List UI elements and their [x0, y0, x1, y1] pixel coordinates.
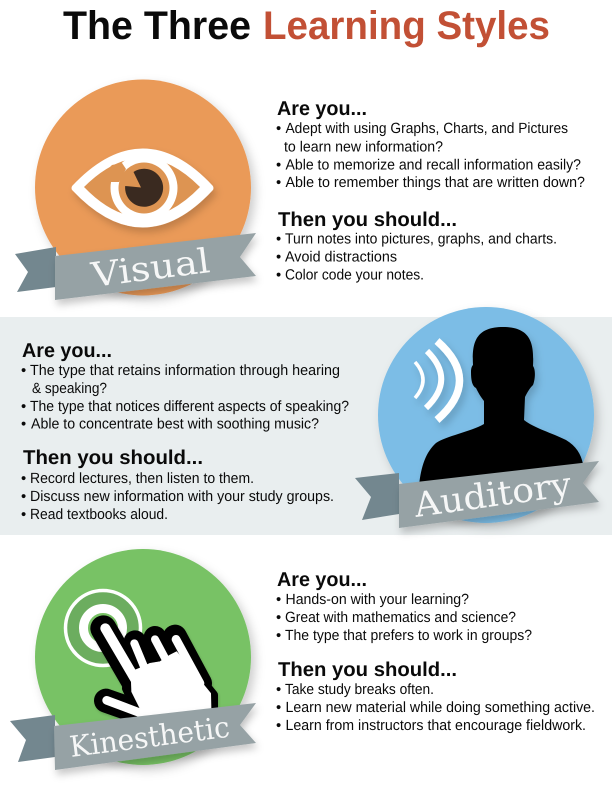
text block: auditory recommendations: •	[21, 507, 26, 523]
text block: visual questions: •	[276, 158, 281, 174]
text block: visual recommendations: Turn notes into pictures, graphs, and charts.	[285, 232, 557, 248]
text block: auditory questions: •	[21, 416, 26, 432]
text block: visual questions: Are you...	[277, 98, 367, 120]
text block: kinesthetic recommendations: Learn from instructors that encourage fieldwork.	[286, 718, 586, 734]
text block: kinesthetic questions: •	[276, 610, 281, 626]
text block: kinesthetic recommendations: •	[276, 682, 281, 698]
panel: auditory badge	[355, 307, 599, 528]
text block: kinesthetic questions: The type that prefers to work in groups?	[285, 628, 532, 644]
icon: pointing hand	[103, 628, 213, 723]
text block: auditory recommendations: Then you should...	[23, 447, 203, 469]
text block: kinesthetic questions: •	[276, 628, 281, 644]
text block: kinesthetic questions: Great with mathematics and science?	[285, 610, 516, 626]
ribbon: auditory	[355, 461, 599, 528]
text block: visual questions: •	[276, 121, 281, 137]
ribbon: kinesthetic	[10, 703, 256, 770]
panel: kinesthetic badge	[10, 549, 256, 770]
text block: auditory recommendations: •	[21, 489, 26, 505]
ribbon label: Visual: Visual	[88, 241, 212, 296]
text block: visual questions: Able to memorize and recall information easily?	[286, 158, 581, 174]
text block: kinesthetic recommendations: Then you should...	[278, 659, 457, 681]
text block: visual recommendations: •	[276, 232, 281, 248]
text block: auditory questions: The type that notices different aspects of speaking?	[30, 399, 349, 415]
text block: auditory recommendations: Record lectures, then listen to them.	[30, 471, 254, 487]
text block: visual recommendations: •	[276, 250, 281, 266]
text block: auditory questions: & speaking?	[32, 381, 107, 397]
text block: visual recommendations: Color code your notes.	[285, 268, 424, 284]
text block: kinesthetic questions: •	[276, 592, 281, 608]
text block: visual questions: Able to remember things that are written down?	[286, 175, 585, 191]
text block: kinesthetic recommendations: Learn new material while doing something active.	[286, 700, 595, 716]
text block: auditory recommendations	[21, 447, 334, 523]
text block: visual questions	[276, 98, 585, 191]
circle: visual	[35, 80, 251, 296]
text block: auditory questions	[21, 340, 349, 432]
ribbon label: Auditory: Auditory	[411, 464, 575, 526]
text block: kinesthetic questions	[276, 569, 532, 644]
text block: auditory questions: •	[21, 399, 26, 415]
text block: visual recommendations: Then you should...	[278, 209, 457, 231]
text block: kinesthetic questions: Are you...	[277, 569, 367, 591]
icon: head silhouette	[419, 327, 583, 486]
title: Learning Styles	[263, 4, 550, 48]
title: The Three	[63, 4, 251, 48]
icon: eye	[75, 152, 210, 224]
text block: visual recommendations: •	[276, 268, 281, 284]
text block: auditory recommendations: •	[21, 471, 26, 487]
panel: visual badge	[15, 80, 256, 300]
text block: kinesthetic recommendations	[276, 659, 595, 734]
text block: visual questions: Adept with using Graphs, Charts, and Pictures	[286, 121, 568, 137]
text block: visual recommendations	[276, 209, 557, 284]
title	[63, 4, 550, 48]
text block: auditory questions: Able to concentrate best with soothing music?	[31, 416, 319, 432]
text block: auditory questions: Are you...	[22, 340, 112, 362]
text block: auditory recommendations: Discuss new information with your study groups.	[30, 489, 334, 505]
circle: auditory	[378, 307, 594, 523]
text block: visual questions: to learn new information?	[284, 140, 443, 156]
icon: sound waves	[415, 341, 460, 420]
text block: auditory questions: •	[21, 363, 26, 379]
panel: auditory background band	[0, 317, 612, 535]
text block: kinesthetic recommendations: •	[276, 700, 281, 716]
ribbon: visual	[15, 233, 256, 300]
ribbon label: Kinesthetic: Kinesthetic	[68, 710, 232, 764]
text block: kinesthetic recommendations: Take study breaks often.	[285, 682, 434, 698]
text block: kinesthetic recommendations: •	[276, 718, 281, 734]
text block: kinesthetic questions: Hands-on with your learning?	[286, 592, 469, 608]
circle: kinesthetic	[35, 549, 251, 765]
text block: visual questions: •	[276, 175, 281, 191]
icon: touch rings	[66, 590, 140, 666]
text block: visual recommendations: Avoid distractions	[285, 250, 397, 266]
text block: auditory recommendations: Read textbooks aloud.	[30, 507, 168, 523]
text block: auditory questions: The type that retains information through hearing	[30, 363, 340, 379]
